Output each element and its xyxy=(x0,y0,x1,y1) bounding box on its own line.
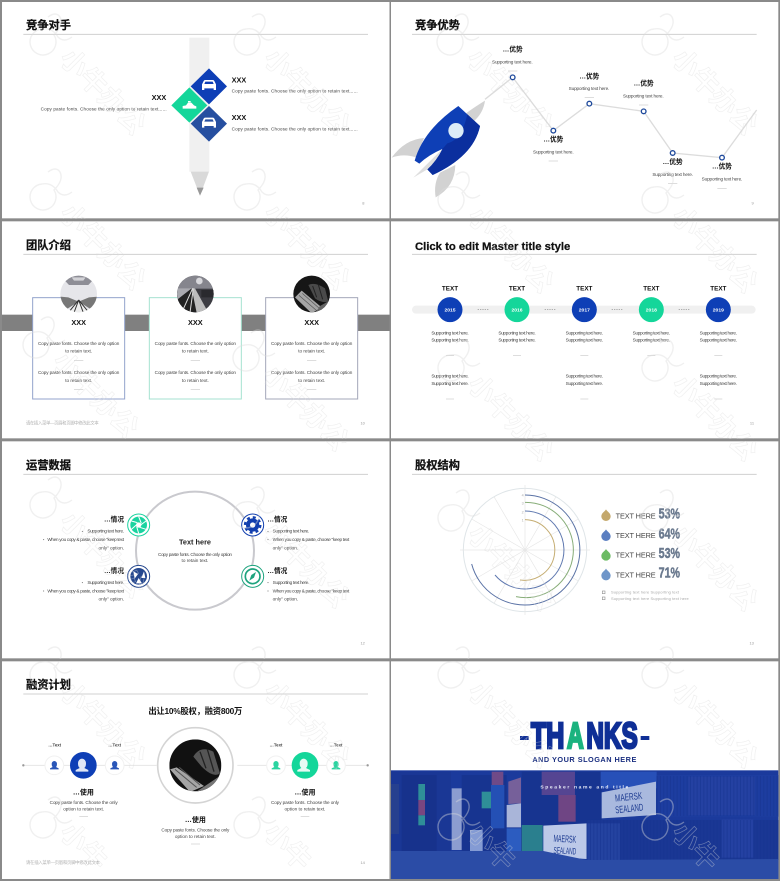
timeline node: 2017: Supporting text here. xyxy=(566,374,603,379)
text block: bottom-left status xyxy=(43,566,125,602)
timeline node: 2016 xyxy=(498,285,536,356)
watermarks: 小牛办公 xyxy=(258,43,355,141)
legend notes: Supporting text here Supporting text xyxy=(611,590,680,595)
band: grey strip xyxy=(0,315,390,331)
timeline node: 2018 xyxy=(633,285,670,356)
chart: radial bars: 4 xyxy=(522,494,524,498)
heading: advantages: 竞争优势 xyxy=(415,18,461,32)
timeline node: 2017: Supporting text here. xyxy=(566,330,603,335)
footer text: 请在插入菜单—页眉和页脚中修改此文本 xyxy=(26,859,101,866)
text block: bottom-right status xyxy=(267,566,350,602)
photo: shipping containers: MAERSK xyxy=(614,791,643,805)
slide: advantages xyxy=(391,2,778,218)
text block: top-right status: When you copy & paste, choose "keep text xyxy=(273,537,350,542)
watermarks: 小牛办公 xyxy=(54,506,151,604)
text block: top-left status: When you copy & paste, choose "keep text xyxy=(47,537,125,542)
page number: 11 xyxy=(750,421,755,426)
left use group: option to retain text. xyxy=(63,806,104,811)
timeline node: 2017: TEXT xyxy=(576,285,593,292)
legend row 1: TEXT HERE xyxy=(616,511,656,520)
timeline node: 2017: 2017 xyxy=(579,307,590,313)
panel: team member 2: XXX xyxy=(188,318,203,327)
text block: lower competitor: XXX xyxy=(232,113,246,122)
page number: 13 xyxy=(749,641,755,646)
icon: navy car diamond xyxy=(191,106,227,142)
page number: 14 xyxy=(360,860,366,865)
right use group: option to retain text. xyxy=(285,806,325,811)
legend notes: Supporting text here Supporting text here xyxy=(611,596,689,601)
timeline node: 2016: Supporting text here. xyxy=(498,338,536,343)
left use group: …Text xyxy=(108,742,122,747)
data point: advantage 2: …优势 xyxy=(543,135,564,144)
watermarks: 小牛办公 xyxy=(462,369,559,467)
arrows: between years xyxy=(478,309,690,311)
photo: central laptop xyxy=(158,728,233,803)
text block: bottom-right status: …情况 xyxy=(267,566,288,575)
panel: team member 3: to retain text. xyxy=(298,378,325,383)
watermarks: 小牛 xyxy=(462,817,521,876)
icon: person large xyxy=(76,759,88,772)
photo: corridor xyxy=(60,275,97,313)
data point: advantage 5: …优势 xyxy=(663,157,683,166)
central ring xyxy=(136,492,254,610)
data point: advantage 4 xyxy=(623,79,664,114)
text block: left competitor xyxy=(41,93,167,111)
timeline node: 2015: Supporting text here. xyxy=(431,330,469,335)
data point: advantage 2: Supporting text here. xyxy=(533,149,574,154)
icon: compass xyxy=(242,565,264,587)
timeline node: 2018: Supporting text here. xyxy=(633,330,670,335)
connector lines xyxy=(23,764,368,767)
text block: centre: to retain text. xyxy=(182,558,208,563)
page number: 8 xyxy=(362,201,365,206)
text block: top-left status: …情况 xyxy=(104,515,124,524)
legend row 3 xyxy=(601,546,680,562)
timeline node: 2019: Supporting text here. xyxy=(700,338,737,343)
title: thanks: TH xyxy=(531,715,564,756)
icon: recycle xyxy=(128,565,150,587)
legend row 4: TEXT HERE xyxy=(616,570,656,579)
data point: advantage 5: Supporting text here. xyxy=(652,172,693,177)
title: thanks xyxy=(520,715,649,756)
panel: team member 1: Copy paste fonts. Choose the only option xyxy=(38,370,120,375)
legend row 4 xyxy=(601,566,680,582)
left use group xyxy=(45,742,124,816)
text block: top-right status: …情况 xyxy=(267,515,288,524)
text block: top-right status xyxy=(267,515,350,550)
page number: 9 xyxy=(752,201,755,206)
text block: bottom-left status: When you copy & paste, choose "keep text xyxy=(47,588,125,593)
legend row 2: TEXT HERE xyxy=(616,531,656,540)
page number: 10 xyxy=(360,421,366,426)
watermarks: 小牛办公 xyxy=(54,43,151,141)
icon: blue car diamond xyxy=(191,68,227,104)
text block: lower competitor: Copy paste fonts. Choose the only option to retain text...... xyxy=(232,126,358,131)
chart: radial bars: 1 xyxy=(522,519,524,523)
panel: team member 2 xyxy=(149,275,241,399)
line end dots xyxy=(22,764,369,766)
panel: team member 3: XXX xyxy=(304,318,319,327)
icon: pencil xyxy=(189,38,209,196)
icon: aperture xyxy=(128,514,150,536)
band: timeline track xyxy=(412,306,756,314)
legend row 3: 53% xyxy=(659,546,680,562)
timeline node: 2017: Supporting text here. xyxy=(566,338,603,343)
chart: radial bars: 3 xyxy=(522,502,524,506)
right use group: …使用 xyxy=(295,787,315,796)
subheading: 出让10%股权，融资800万 xyxy=(148,706,242,716)
title: thanks: NKS xyxy=(586,715,638,756)
data point: advantage 3 xyxy=(569,71,609,106)
timeline node: 2017 xyxy=(566,285,603,399)
data point: advantage 1 xyxy=(492,45,533,80)
watermarks: 小牛办公 xyxy=(666,676,763,774)
right use group: …Text xyxy=(330,742,343,747)
photo: shipping containers: SEALAND xyxy=(615,802,644,816)
legend row 1 xyxy=(601,507,680,523)
timeline node: 2016: 2016 xyxy=(511,307,523,313)
timeline node: 2015: Supporting text here. xyxy=(431,381,469,386)
watermarks: 小牛办公 xyxy=(54,198,151,296)
slogan: AND YOUR SLOGAN HERE xyxy=(532,755,636,764)
text block: bottom-right status: When you copy & paste, choose "keep text xyxy=(273,588,350,593)
data point: advantage 6 xyxy=(702,155,742,188)
panel: team member 3: Copy paste fonts. Choose the only option xyxy=(271,370,353,375)
text block: top-right status: Supporting text here. xyxy=(273,529,309,534)
timeline node: 2019 xyxy=(700,285,737,399)
timeline node: 2019: TEXT xyxy=(710,285,727,292)
panel: team member 2: Copy paste fonts. Choose the only option xyxy=(155,341,236,346)
legend notes xyxy=(602,590,689,601)
text block: lower competitor xyxy=(232,113,358,131)
right use group: Copy paste fonts. Choose the only xyxy=(271,800,340,805)
text block: bottom-left status: …情况 xyxy=(104,566,124,575)
data point: advantage 1: Supporting text here. xyxy=(492,60,533,65)
legend row 4: 71% xyxy=(659,566,680,582)
timeline node: 2019: Supporting text here. xyxy=(700,381,737,386)
text block: centre use xyxy=(161,815,230,844)
panel: team member 2: to retain text. xyxy=(182,378,209,383)
watermarks: 小牛办公 xyxy=(666,201,763,299)
photo: shipping containers: MAERSK xyxy=(553,834,577,846)
text block: top-left status xyxy=(43,515,125,550)
timeline node: 2015: TEXT xyxy=(442,285,458,292)
timeline node: 2015: 2015 xyxy=(444,307,456,313)
text block: top-left status: only" option. xyxy=(99,545,124,550)
timeline node: 2015: Supporting text here. xyxy=(431,338,469,343)
watermarks: 小牛办公 xyxy=(258,198,355,296)
panel: team member 3: to retain text. xyxy=(298,349,325,354)
data point: advantage 4: Supporting text here. xyxy=(623,93,664,98)
page number: 12 xyxy=(360,641,366,646)
slide: team xyxy=(0,221,390,438)
heading: master title: Click to edit Master title style xyxy=(415,241,570,253)
timeline node: 2019: 2019 xyxy=(713,307,724,313)
data point: advantage 3: Supporting text here. xyxy=(569,86,609,91)
heading: financing: 融资计划 xyxy=(26,677,71,691)
text block: top competitor xyxy=(232,75,358,94)
text block: bottom-left status: only" option. xyxy=(99,597,124,602)
timeline node: 2018: Supporting text here. xyxy=(633,338,670,343)
panel: team member 2: Copy paste fonts. Choose the only option xyxy=(155,370,236,375)
watermarks: 小牛办公 xyxy=(258,676,355,774)
heading: competitors: 竞争对手 xyxy=(26,18,71,32)
text block: top competitor: XXX xyxy=(232,75,246,84)
timeline node: 2015: Supporting text here. xyxy=(431,374,469,379)
panel: team member 3: Copy paste fonts. Choose the only option xyxy=(271,341,353,346)
watermarks: 小牛办公 xyxy=(462,201,559,299)
slide: operations xyxy=(2,441,390,658)
watermarks: 小牛 xyxy=(54,817,113,876)
text block: centre: Text here xyxy=(179,538,211,547)
text block: bottom-right status: Supporting text here. xyxy=(273,580,309,585)
timeline node: 2015 xyxy=(431,285,469,399)
slide: timeline xyxy=(391,221,778,438)
text block: left competitor: Copy paste fonts. Choose the only option to retain text...... xyxy=(41,106,167,111)
timeline node: 2018: 2018 xyxy=(646,307,657,313)
icon: person small 3 xyxy=(272,761,280,769)
legend row 1: 53% xyxy=(659,507,680,523)
watermarks: 小牛 xyxy=(666,817,725,876)
text block: top-left status: Supporting text here. xyxy=(87,529,124,534)
timeline node: 2019: Supporting text here. xyxy=(700,374,737,379)
heading: equity: 股权结构 xyxy=(415,458,460,472)
panel: team member 1: Copy paste fonts. Choose the only option xyxy=(38,341,120,346)
watermarks: 小牛办公 xyxy=(666,43,763,141)
panel: team member 1: XXX xyxy=(71,318,86,327)
watermarks: 小牛办公 xyxy=(666,519,763,617)
left use group: …Text xyxy=(48,742,62,747)
footer text: 请在插入菜单—页眉和页脚中修改此文本 xyxy=(26,420,99,427)
text block: top competitor: Copy paste fonts. Choose the only option to retain text...... xyxy=(232,89,358,94)
heading: team: 团队介绍 xyxy=(26,238,71,252)
photo: laptop xyxy=(293,275,331,313)
text block: bottom-right status: only" option. xyxy=(273,597,298,602)
legend row 2 xyxy=(601,526,680,542)
watermarks: 小牛办公 xyxy=(47,346,144,444)
data point: advantage 3: …优势 xyxy=(579,71,600,80)
timeline node: 2017: Supporting text here. xyxy=(566,381,603,386)
slide: competitors xyxy=(2,2,390,218)
left use group: …使用 xyxy=(73,787,94,796)
icon: person small 4 xyxy=(332,761,340,769)
slide: equity structure xyxy=(391,441,778,658)
title: thanks: A xyxy=(567,715,584,756)
icon: gear xyxy=(242,514,264,536)
watermarks: 小牛办公 xyxy=(666,369,763,467)
watermarks: 小牛办公 xyxy=(462,676,559,774)
heading: operations: 运营数据 xyxy=(26,458,71,472)
legend row 2: 64% xyxy=(659,526,680,542)
data point: advantage 6: …优势 xyxy=(712,161,732,170)
icon: person small xyxy=(50,761,59,769)
data point: advantage 2 xyxy=(533,128,574,161)
text block: centre xyxy=(158,538,232,563)
text block: bottom-left status: Supporting text here. xyxy=(87,580,124,585)
right use group xyxy=(267,742,345,816)
watermarks: 小牛办公 xyxy=(257,516,354,614)
photo: shipping containers: SEALAND xyxy=(553,845,577,857)
icon: green taxi diamond xyxy=(171,87,207,123)
timeline node: 2016: TEXT xyxy=(509,285,525,292)
timeline node: 2019: Supporting text here. xyxy=(700,330,737,335)
text block: left competitor: XXX xyxy=(152,93,166,102)
icon: person large green xyxy=(297,759,310,772)
text block: centre use: …使用 xyxy=(185,815,206,824)
panel: team member 3 xyxy=(266,275,358,399)
timeline node: 2018: TEXT xyxy=(643,285,660,292)
data point: advantage 5 xyxy=(652,151,693,183)
legend row 3: TEXT HERE xyxy=(616,551,656,560)
watermarks: 小牛办公 xyxy=(54,676,151,774)
chart: flight path line xyxy=(485,77,757,158)
slide: financing plan xyxy=(2,661,390,879)
icon: rocket xyxy=(392,101,485,197)
watermarks: 小牛办公 xyxy=(462,519,559,617)
text block: centre use: option to retain text. xyxy=(175,834,216,839)
icon: person small 2 xyxy=(110,761,119,769)
watermarks: 小牛办公 xyxy=(257,359,354,457)
data point: advantage 6: Supporting text here. xyxy=(702,176,742,181)
text block: centre use: Copy paste fonts. Choose the only xyxy=(161,828,230,833)
watermarks: 小牛办公 xyxy=(461,43,558,141)
left use group: Copy paste fonts. Choose the only xyxy=(50,800,118,805)
photo: shipping containers xyxy=(391,770,778,879)
data point: advantage 4: …优势 xyxy=(634,79,654,88)
panel: team member 1: to retain text. xyxy=(65,349,92,354)
photo: road xyxy=(177,275,214,313)
data point: advantage 1: …优势 xyxy=(503,45,523,54)
right use group: …Text xyxy=(270,742,283,747)
panel: team member 1 xyxy=(33,275,125,399)
watermarks: 小牛 xyxy=(258,817,317,876)
text block: centre: Copy paste fonts. Choose the only option xyxy=(158,552,232,557)
speaker line: Speaker name and title xyxy=(540,784,629,790)
chart: radial bars xyxy=(460,485,590,615)
timeline node: 2016: Supporting text here. xyxy=(498,330,536,335)
chart: radial bars: 2 xyxy=(522,510,524,514)
slide: thanks xyxy=(391,661,778,879)
panel: team member 1: to retain text. xyxy=(65,378,92,383)
text block: top-right status: only" option. xyxy=(273,545,298,550)
panel: team member 2: to retain text. xyxy=(182,349,209,354)
